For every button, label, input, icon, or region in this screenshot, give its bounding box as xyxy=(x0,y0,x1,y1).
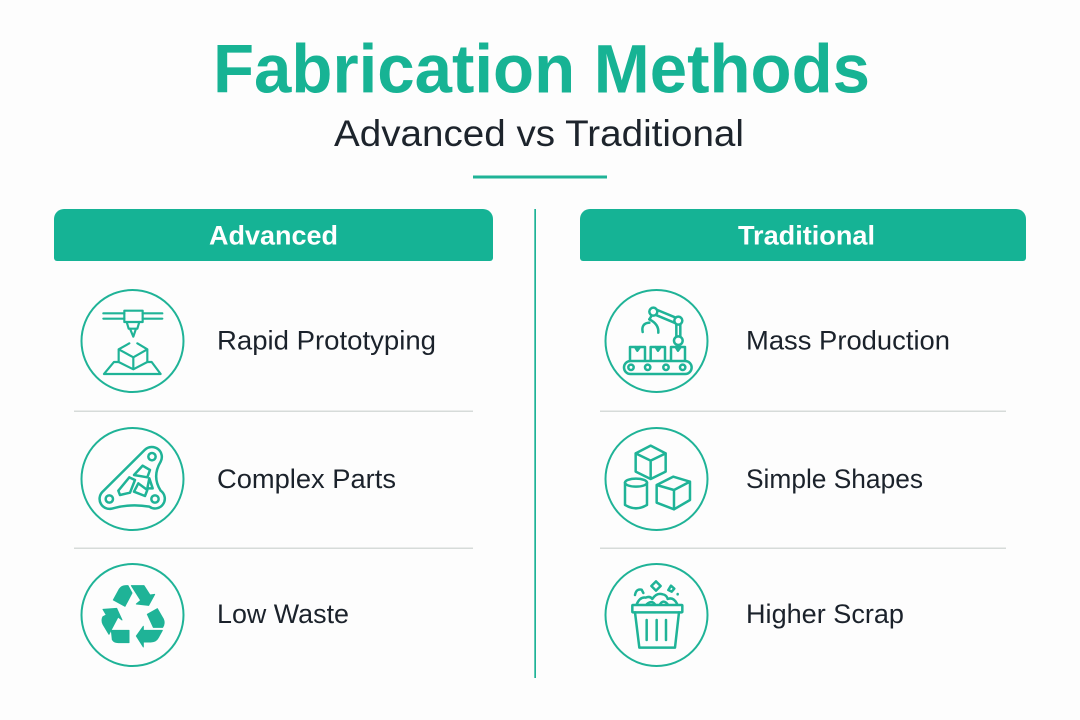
row: complex parts xyxy=(82,428,396,530)
label: Low Waste xyxy=(217,599,349,629)
panel: advanced xyxy=(54,209,493,666)
traditional header bar xyxy=(580,209,1026,261)
icon: 3d printer xyxy=(103,311,162,374)
label: Mass Production xyxy=(746,326,950,356)
center divider xyxy=(534,209,536,678)
icon: robot arm conveyor xyxy=(624,308,692,374)
row: low waste xyxy=(82,564,349,666)
label: Complex Parts xyxy=(217,464,396,494)
traditional header bar: Traditional xyxy=(738,220,875,250)
row: rapid prototyping xyxy=(82,290,436,392)
title underline xyxy=(473,176,607,178)
row: mass production xyxy=(606,290,950,392)
icon: cubes and cylinder xyxy=(625,446,690,509)
subtitle: Advanced vs Traditional xyxy=(334,113,744,154)
advanced header bar xyxy=(54,209,493,261)
title: Fabrication Methods xyxy=(213,30,870,108)
panel: traditional xyxy=(580,209,1026,666)
label: Higher Scrap xyxy=(746,599,904,629)
row: simple shapes xyxy=(606,428,923,530)
label: Simple Shapes xyxy=(746,464,923,494)
row: higher scrap xyxy=(606,564,904,666)
advanced header bar: Advanced xyxy=(209,220,338,250)
icon: scrap bin xyxy=(632,581,682,648)
label: Rapid Prototyping xyxy=(217,326,436,356)
icon: recycle xyxy=(102,586,164,647)
icon: lattice bracket xyxy=(100,447,165,509)
